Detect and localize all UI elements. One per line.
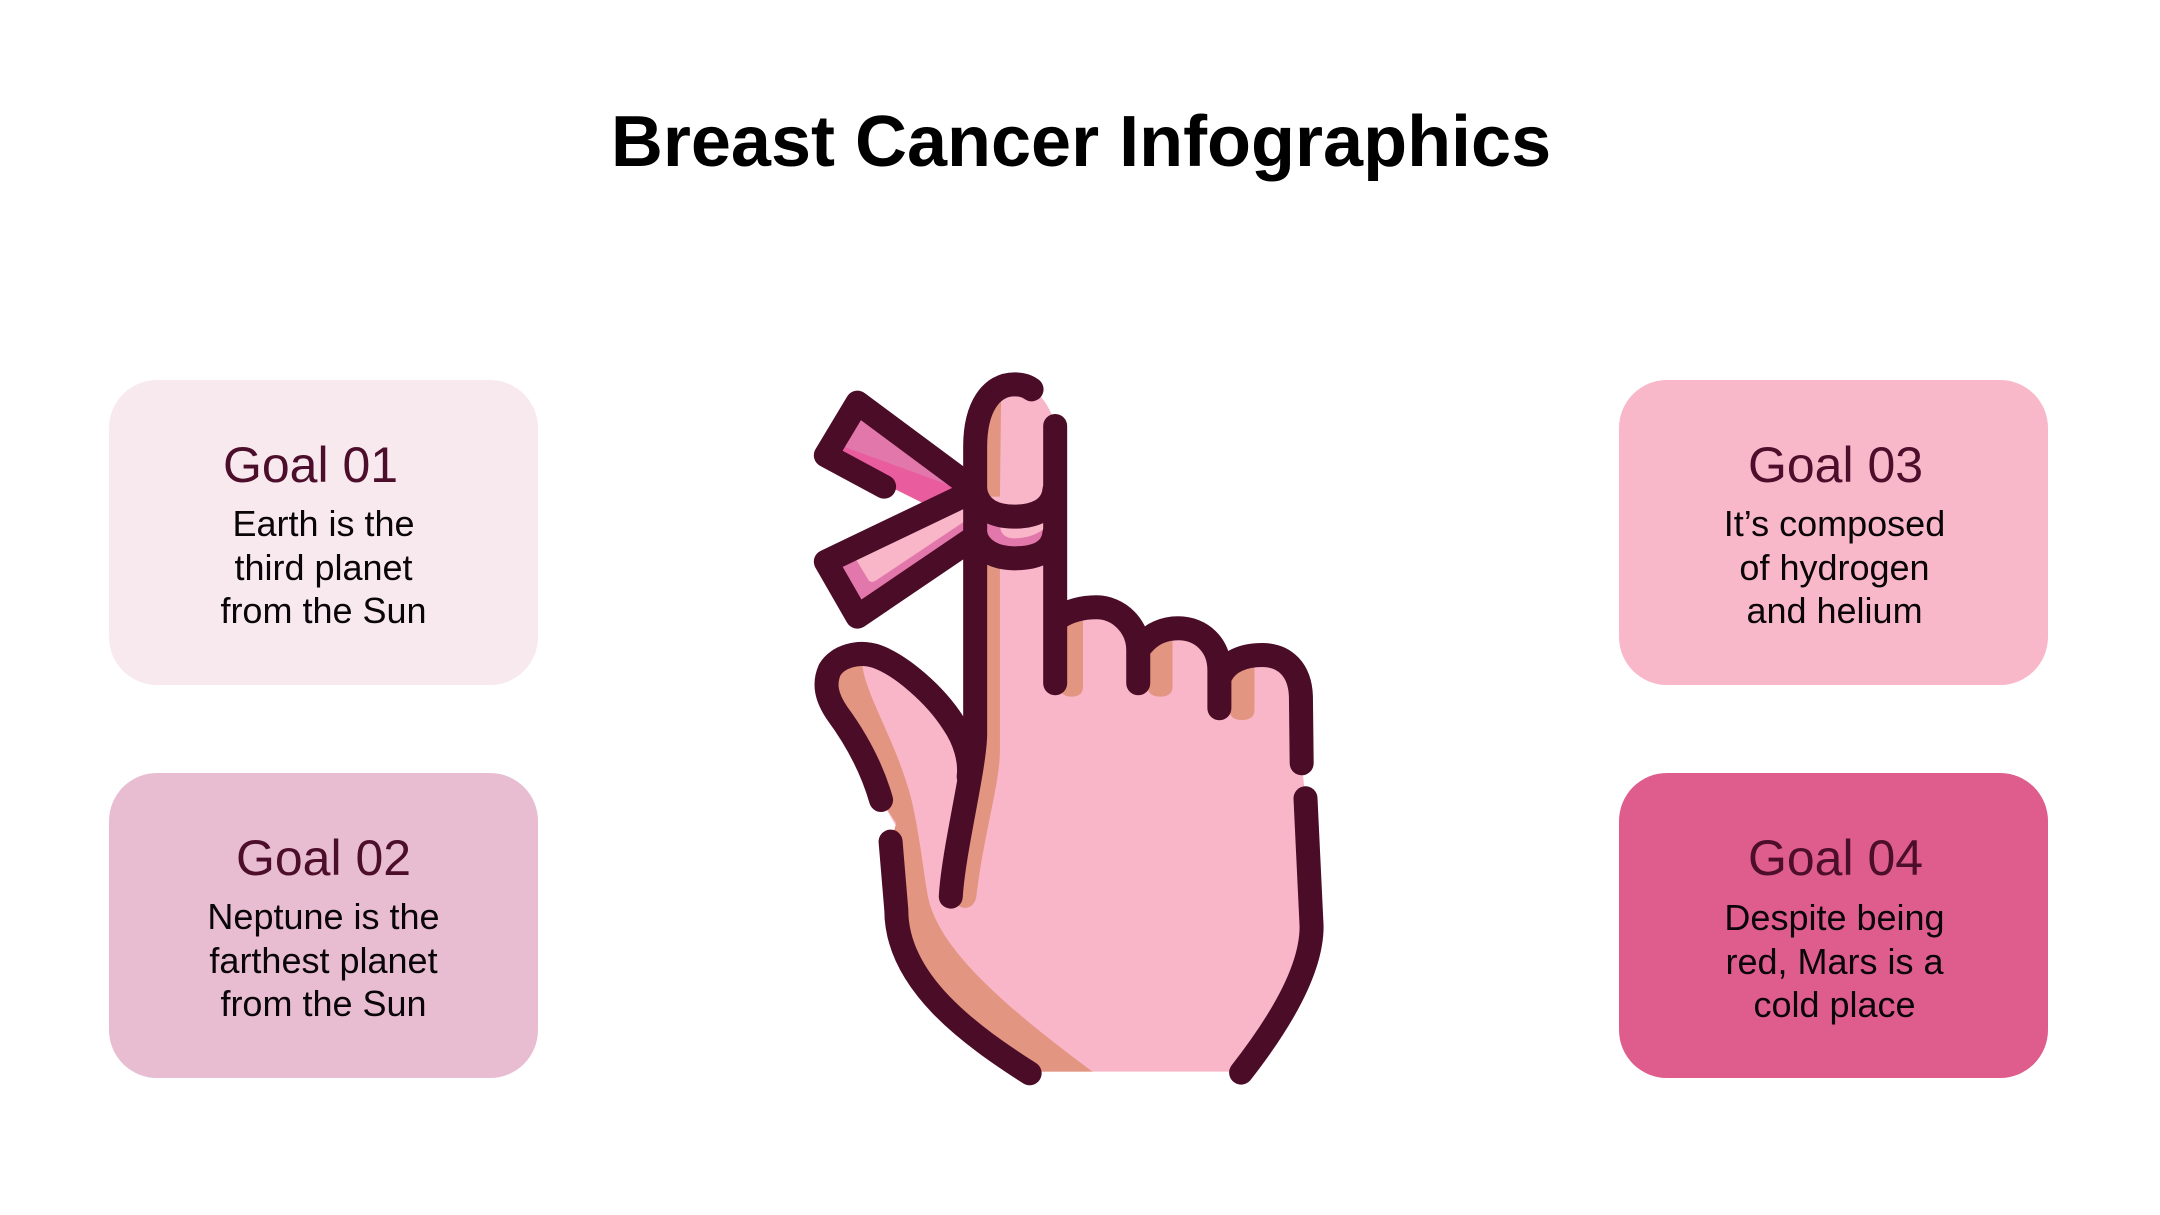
panel: goal 04 [1619, 773, 2048, 1078]
text: goal 02 [207, 896, 440, 1024]
text: goal 03: and helium [1746, 590, 1923, 631]
heading: goal 02: Goal 02 [236, 830, 411, 886]
text: goal 04: cold place [1753, 984, 1916, 1025]
panel: goal 01 [109, 380, 538, 685]
heading: goal 01: Goal 01 [223, 437, 398, 493]
ribbon band on finger [982, 517, 1051, 553]
panel: goal 02 [109, 773, 538, 1078]
text: goal 03: It’s composed [1724, 503, 1945, 544]
ribbon lower tail [826, 493, 971, 617]
text: goal 02: Neptune is the [207, 896, 440, 937]
text: goal 04: Despite being [1724, 897, 1945, 938]
ribbon upper tail [826, 403, 971, 505]
text: goal 02: farthest planet [209, 940, 438, 980]
text: goal 03: of hydrogen [1739, 546, 1930, 588]
text: goal 04: red, Mars is a [1725, 940, 1944, 982]
panel: goal 03 [1619, 380, 2048, 685]
title: Breast Cancer Infographics [611, 102, 1551, 182]
text: goal 01 [220, 503, 427, 631]
hand outlines [827, 384, 1312, 1073]
text: goal 01: third planet [234, 546, 413, 588]
hand fill [827, 385, 1312, 1072]
heading: goal 03: Goal 03 [1748, 437, 1923, 493]
text: goal 03 [1724, 503, 1945, 631]
hand shading [828, 397, 1254, 1072]
text: goal 04 [1724, 897, 1945, 1025]
text: goal 01: Earth is the [232, 503, 415, 544]
text: goal 02: from the Sun [220, 983, 427, 1024]
heading: goal 04: Goal 04 [1748, 830, 1923, 886]
text: goal 01: from the Sun [220, 590, 427, 631]
